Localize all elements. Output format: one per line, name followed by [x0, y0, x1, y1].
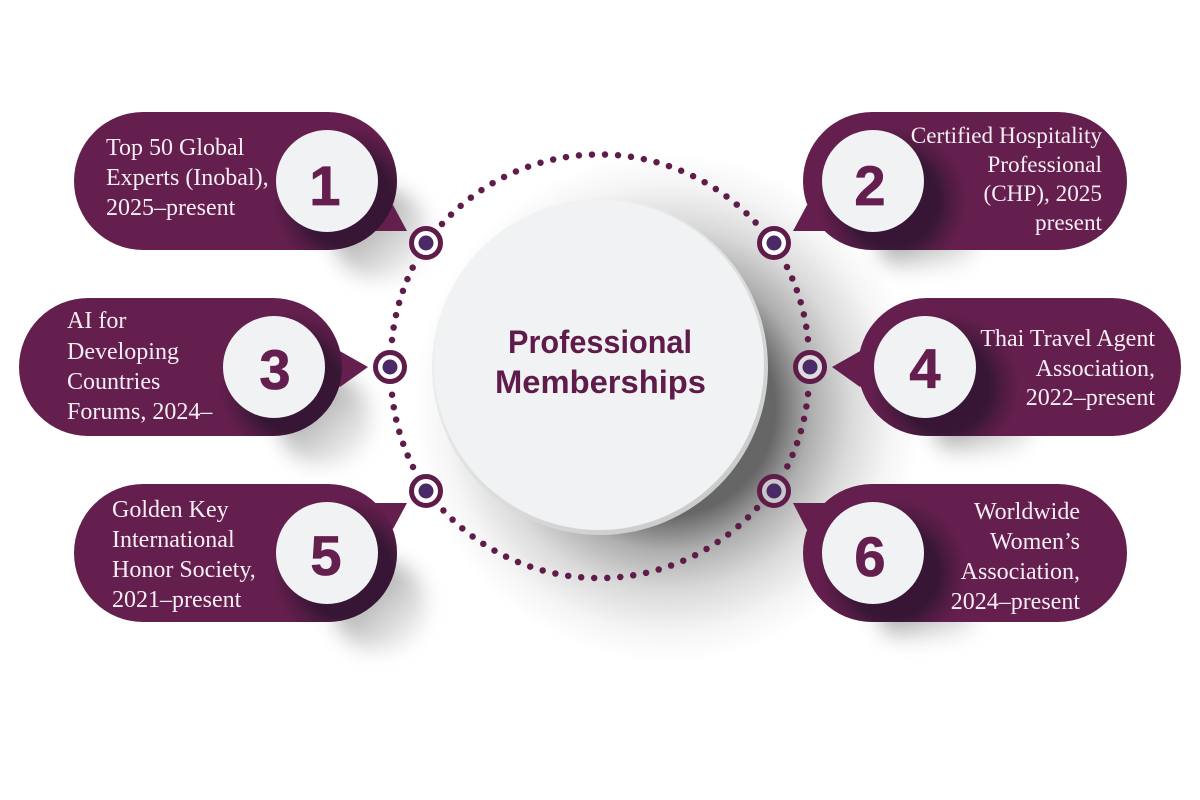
- number disc 1: 1: [309, 154, 341, 217]
- text 3: Forums, 2024–: [67, 399, 213, 425]
- text 5: Golden Key: [112, 497, 229, 523]
- text 2: present: [1035, 210, 1103, 236]
- text 6: Worldwide: [974, 499, 1080, 525]
- text 3: AI for: [67, 308, 126, 334]
- number disc 2: 2: [854, 154, 886, 217]
- text 1: 2025–present: [106, 195, 236, 221]
- callout 4: [832, 298, 1181, 436]
- central circle: [432, 199, 768, 535]
- callout 6: [793, 484, 1127, 622]
- number disc 4: [874, 316, 976, 418]
- text 5: International: [112, 527, 235, 553]
- text 3: Developing: [67, 339, 179, 365]
- text 4: Thai Travel Agent: [980, 326, 1155, 352]
- number disc 4: 4: [909, 337, 941, 400]
- text 1: [106, 135, 269, 221]
- callout 1: [74, 112, 407, 250]
- node markers: [376, 228, 824, 506]
- text 6: [951, 499, 1080, 615]
- text 6: Association,: [961, 559, 1080, 585]
- text 2: [911, 123, 1103, 236]
- number disc 3: [223, 316, 325, 418]
- text 3: present: [67, 432, 137, 458]
- text 1: Experts (Inobal),: [106, 165, 269, 191]
- number disc 3: 3: [259, 338, 291, 401]
- number disc 6: 6: [854, 525, 886, 588]
- text 5: Honor Society,: [112, 557, 256, 583]
- callout 5: [74, 484, 407, 622]
- dotted ring: [392, 154, 808, 578]
- text 6: Women’s: [990, 529, 1080, 555]
- text 2: Professional: [987, 152, 1102, 178]
- text 4: 2022–present: [1026, 385, 1155, 411]
- text 4: [980, 326, 1155, 411]
- text 5: 2021–present: [112, 587, 242, 613]
- number disc 5: [276, 502, 378, 604]
- title: [495, 324, 706, 400]
- callout 3: [19, 298, 368, 436]
- text 6: 2024–present: [951, 589, 1080, 615]
- text 3: Countries: [67, 369, 160, 395]
- title: Memberships: [495, 364, 706, 400]
- text 2: (CHP), 2025: [983, 181, 1102, 207]
- number disc 6: [822, 502, 924, 604]
- text 1: Top 50 Global: [106, 135, 245, 161]
- pill cast shadows: [280, 190, 1030, 650]
- number disc 2: [822, 130, 924, 232]
- number disc 1: [276, 130, 378, 232]
- central circle cast shadow: [413, 153, 923, 663]
- callout 2: [793, 112, 1127, 250]
- text 2: Certified Hospitality: [911, 123, 1102, 149]
- title: Professional: [508, 324, 692, 360]
- text 3: [67, 311, 213, 423]
- text 5: [112, 497, 256, 613]
- number disc 5: 5: [310, 524, 342, 587]
- text 4: Association,: [1036, 356, 1155, 382]
